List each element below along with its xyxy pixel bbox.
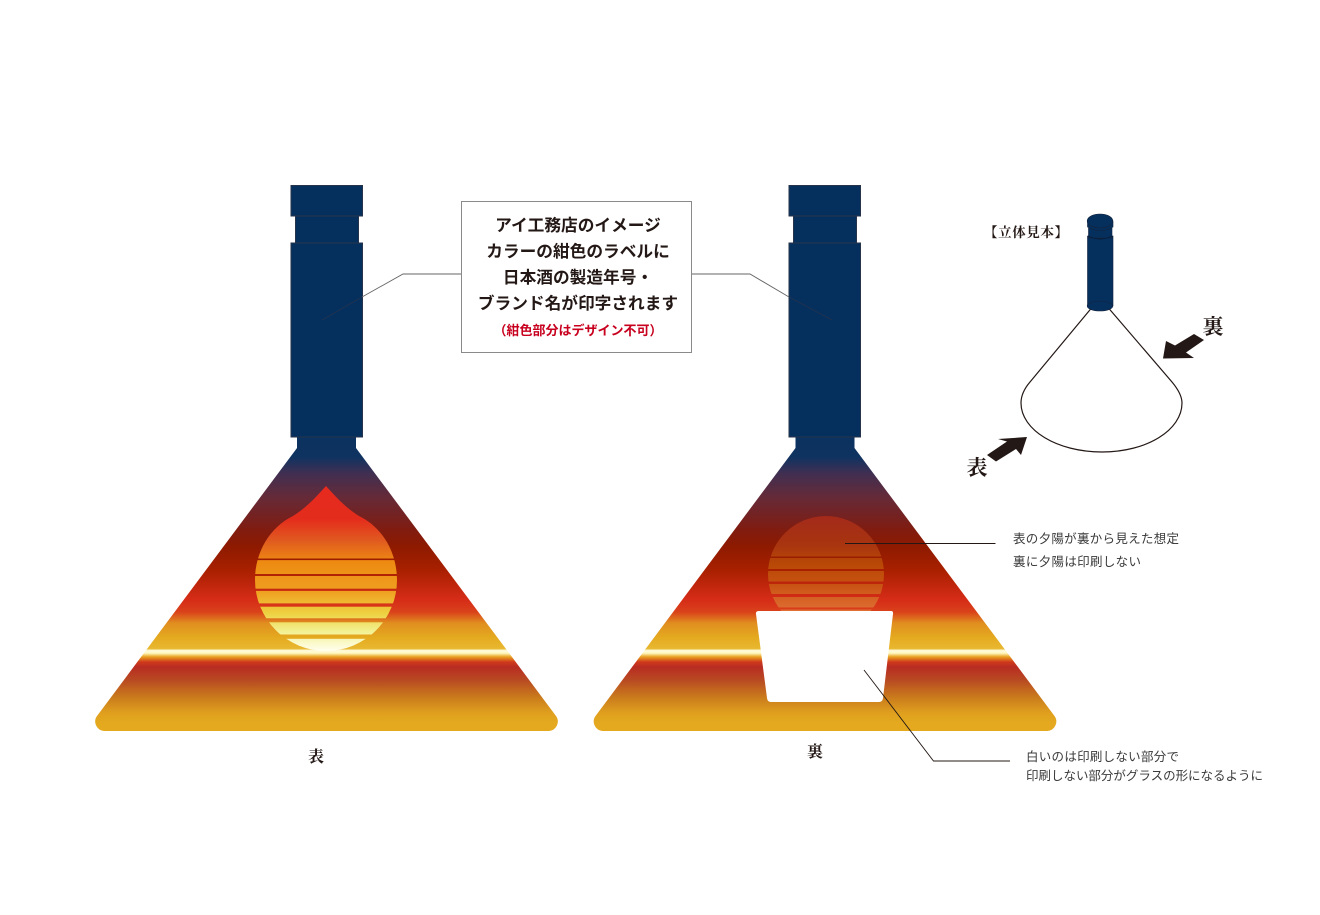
callout box: アイ工務店のイメージ (495, 216, 661, 235)
front neck label (291, 186, 362, 437)
arrow: front (987, 437, 1027, 462)
white unprinted glass shape (756, 611, 893, 702)
bottle: back view (594, 186, 1056, 731)
front glass gradient body (95, 438, 558, 731)
back glass gradient body (594, 438, 1056, 731)
connector lines from callout to neck labels (322, 274, 832, 320)
callout box: 日本酒の製造年号・ (503, 267, 653, 287)
label: front: 表 (308, 747, 324, 766)
annotation: sun seen from back (845, 531, 1179, 569)
annotation: white unprinted part (864, 670, 1263, 783)
front sunset drop (255, 486, 397, 651)
sample neck (1087, 214, 1113, 311)
label: back: 裏 (807, 742, 823, 761)
annotation: sun seen from back: 表の夕陽が裏から見えた想定 (1013, 531, 1179, 546)
bottle: front view (95, 186, 558, 731)
callout box (462, 202, 692, 352)
back neck label (789, 186, 860, 437)
callout box: （紺色部分はデザイン不可） (493, 323, 663, 338)
sample heading: 【立体見本】 (984, 224, 1068, 240)
annotation: white unprinted part: 白いのは印刷しない部分で (1026, 749, 1179, 764)
arrow: back (1163, 334, 1204, 358)
sample flask outline (1021, 308, 1182, 452)
callout box: ブランド名が印字されます (478, 293, 678, 313)
label: back arrow: 裏 (1202, 315, 1224, 339)
callout box: カラーの紺色のラベルに (486, 241, 670, 261)
faint sun seen through the back (768, 516, 884, 611)
annotation: white unprinted part: 印刷しない部分がグラスの形になるように (1026, 768, 1263, 783)
3D sample diagram (966, 214, 1224, 480)
label: front arrow: 表 (966, 456, 988, 480)
annotation: sun seen from back: 裏に夕陽は印刷しない (1013, 555, 1141, 569)
